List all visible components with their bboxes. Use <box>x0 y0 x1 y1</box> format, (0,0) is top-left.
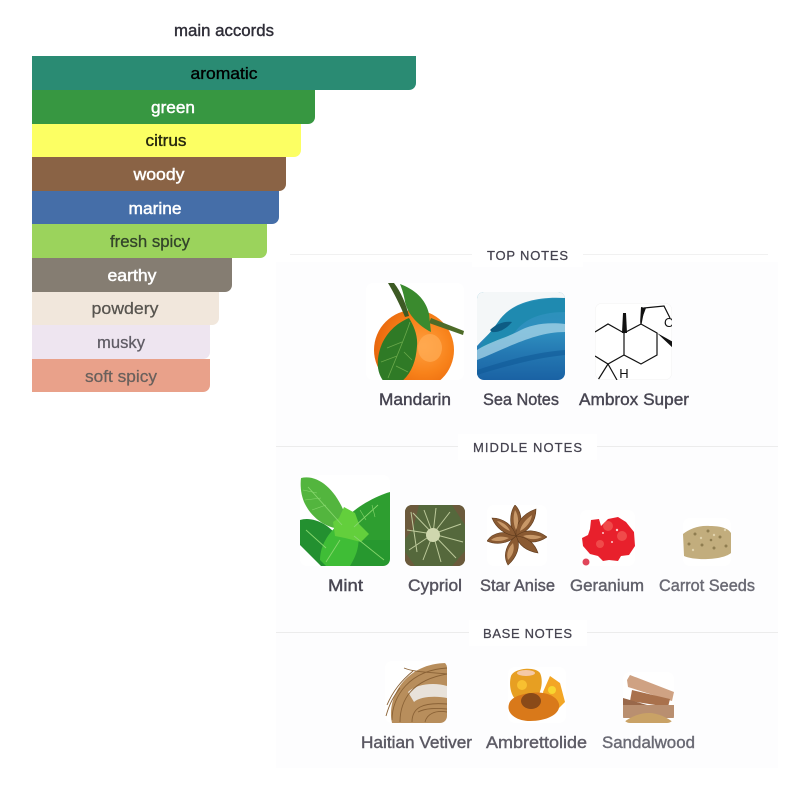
label: Sea Notes: Sea Notes <box>483 391 559 409</box>
bar: woody <box>32 157 286 191</box>
bar: citrus <box>32 124 301 157</box>
bar: soft spicy <box>32 359 210 392</box>
icon: ambrox molecule <box>595 303 675 381</box>
bar: fresh spicy <box>32 224 267 258</box>
bar: earthy: earthy <box>108 267 157 285</box>
heading: middle notes <box>276 434 778 460</box>
icon: geranium <box>582 517 635 566</box>
bar: green <box>32 90 315 124</box>
icon: sea wave <box>477 292 565 380</box>
label: Mint: Mint <box>328 577 363 595</box>
icon: ambrox molecule: O <box>664 315 674 330</box>
icon: cypriol <box>405 505 465 566</box>
heading: base notes <box>276 620 778 646</box>
heading: top notes: TOP NOTES <box>487 248 568 263</box>
heading: base notes: BASE NOTES <box>483 626 572 641</box>
bar: musky: musky <box>97 334 146 352</box>
chart: main accords bars <box>32 56 416 392</box>
label: Sandalwood: Sandalwood <box>602 734 695 752</box>
bar: green: green <box>151 99 195 117</box>
bar: citrus: citrus <box>146 132 186 150</box>
bar: soft spicy: soft spicy <box>85 368 158 386</box>
label: Ambrettolide: Ambrettolide <box>486 734 587 752</box>
icon: sandalwood <box>623 672 674 723</box>
label: Carrot Seeds: Carrot Seeds <box>659 577 755 595</box>
bar: marine: marine <box>128 200 182 218</box>
icon: vetiver <box>385 661 447 723</box>
icon: star anise <box>487 505 547 566</box>
bar: powdery: powdery <box>92 300 159 318</box>
icon: ambrox molecule: H <box>619 366 629 381</box>
bar: musky <box>32 325 210 359</box>
label: Cypriol: Cypriol <box>408 577 462 595</box>
bar: fresh spicy: fresh spicy <box>110 233 191 251</box>
bar: woody: woody <box>132 166 185 184</box>
icon: ambrettolide <box>508 667 566 723</box>
heading: main accords: main accords <box>174 22 274 40</box>
label: Geranium: Geranium <box>570 577 644 595</box>
icon: mint <box>300 475 390 566</box>
label: Mandarin: Mandarin <box>379 391 451 409</box>
label: Ambrox Super: Ambrox Super <box>579 391 690 409</box>
bar: earthy <box>32 258 232 292</box>
icon: carrot seeds <box>683 526 731 560</box>
label: Haitian Vetiver: Haitian Vetiver <box>361 734 473 752</box>
notes panel background <box>276 262 778 768</box>
bar: powdery <box>32 292 219 325</box>
heading: top notes <box>290 243 768 267</box>
label: Star Anise: Star Anise <box>480 577 555 595</box>
bar: aromatic <box>32 56 416 90</box>
bar: marine <box>32 191 279 224</box>
icon: mandarin <box>374 283 464 380</box>
bar: aromatic: aromatic <box>190 65 258 83</box>
heading: middle notes: MIDDLE NOTES <box>473 440 582 455</box>
